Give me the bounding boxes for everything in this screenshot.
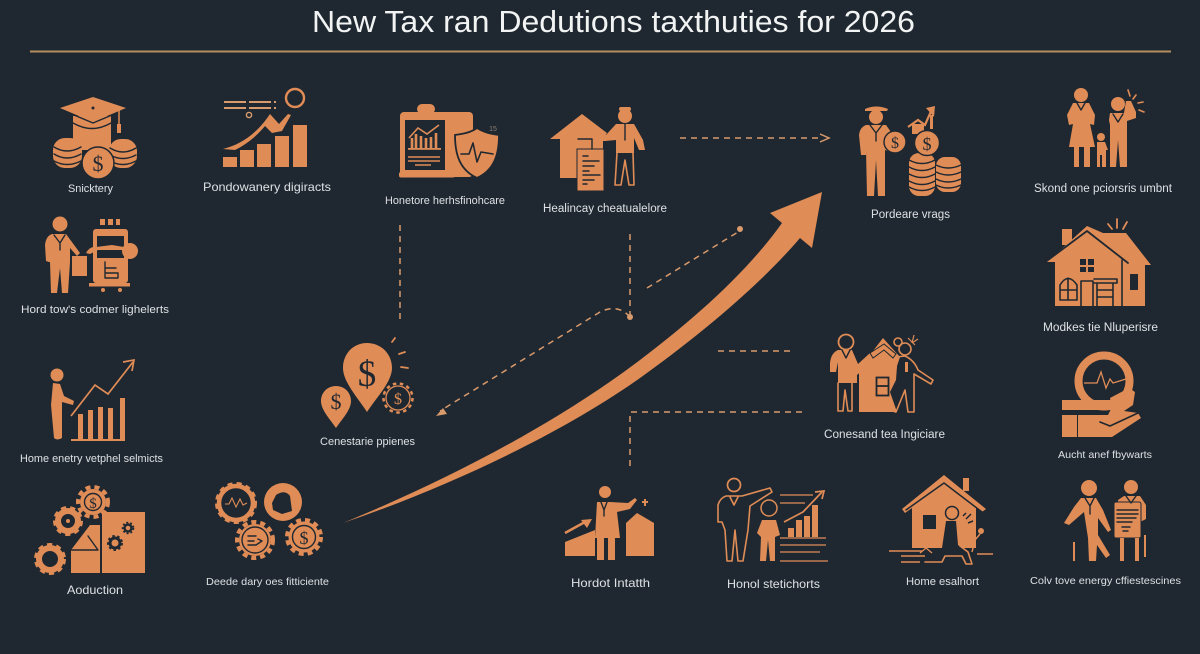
label: Snicktery: [68, 183, 113, 195]
icon group: clipboard and shield: 15: [489, 126, 497, 133]
icon group: dollar location pins: [321, 338, 412, 428]
label: Pondowanery digiracts: [203, 180, 331, 194]
icon group: graduation cap and coins: $: [92, 151, 104, 176]
icon group: clipboard and shield: [399, 104, 499, 178]
icon group: house: [1047, 219, 1151, 306]
label: Colv tove energy cffiestescines: [1030, 575, 1181, 587]
label: Home enetry vetphel selmicts: [20, 453, 163, 465]
label: Skond one pciorsris umbnt: [1034, 183, 1173, 195]
icon group: dollar location pins: $: [358, 354, 376, 395]
label: Pordeare vrags: [871, 209, 950, 221]
label: Conesand tea Ingiciare: [824, 429, 945, 441]
label: Aucht anef fbywarts: [1058, 449, 1152, 461]
label: Hord tow's codmer lighelerts: [21, 304, 170, 316]
dashed connector: curve to pin icon: [436, 234, 633, 416]
icon group: four gears: [217, 483, 321, 558]
dashed connector: vertical left: [399, 225, 401, 322]
icon group: person with cart machine: [45, 216, 138, 293]
icon group: graduation cap and coins: [53, 97, 137, 179]
label: Hordot Intatth: [571, 576, 650, 590]
icon group: family: [1067, 88, 1144, 167]
icon group: dollar location pins: $: [394, 391, 402, 408]
label: Modkes tie Nluperisre: [1043, 322, 1158, 334]
icon group: rising bar chart: [223, 89, 307, 167]
icon group: two people with document: [1064, 480, 1146, 561]
dashed connector: middle right: [718, 350, 792, 352]
label: Deede dary oes fitticiente: [206, 576, 329, 588]
label: Honol stetichorts: [727, 577, 820, 591]
icon group: worker with coins: $: [891, 135, 899, 152]
icon group: house and worker with document: [550, 107, 645, 191]
big growth arrow: [343, 192, 822, 523]
icon group: people with house: [830, 334, 933, 412]
label: Aoduction: [67, 583, 123, 597]
dashed arrow: top to coins: [680, 134, 829, 142]
label: Home esalhort: [906, 576, 979, 588]
title: New Tax ran Dedutions taxthuties for 2026: [312, 5, 915, 39]
icon group: outlined person, child and chart: [718, 478, 828, 561]
icon group: hand holding heartbeat ring: [1062, 356, 1141, 437]
icon group: house and kneeling person: [889, 475, 993, 564]
icon group: person with trend chart: [50, 360, 134, 441]
icon group: gears and boxes: $: [89, 496, 97, 512]
label: Honetore herhsfinohcare: [385, 195, 505, 207]
dashed connector: diagonal: [647, 226, 743, 288]
label: Cenestarie ppienes: [320, 436, 415, 448]
label: Healincay cheatualelore: [543, 203, 667, 215]
icon group: gears and boxes: [36, 487, 145, 573]
icon group: worker with coins: [859, 106, 961, 196]
icon group: dollar location pins: $: [330, 389, 342, 414]
icon group: four gears: $: [300, 528, 308, 548]
dashed connector: bottom elbow: [630, 412, 802, 466]
icon group: worker with coins: $: [922, 134, 932, 154]
icon group: person pointing with slope and house: [565, 486, 654, 560]
